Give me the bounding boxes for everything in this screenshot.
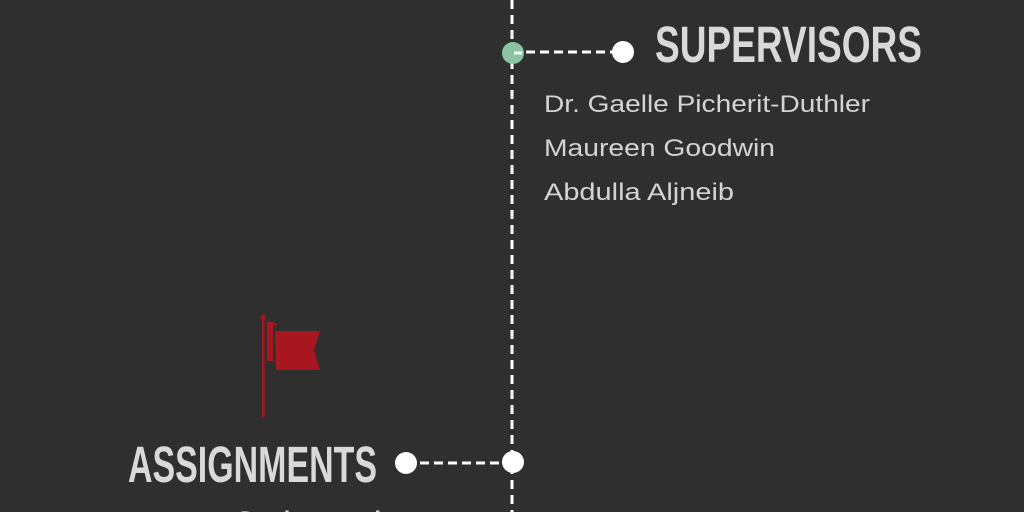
heading: assignments: ASSIGNMENTS [128,436,377,493]
supervisors connector [502,41,634,64]
heading: supervisors: SUPERVISORS [655,16,922,73]
supervisors list: Abdulla Aljneib [544,179,734,206]
supervisors list [544,91,870,206]
supervisors list: Dr. Gaelle Picherit-Duthler [544,91,870,118]
supervisors list: Maureen Goodwin [544,135,775,162]
assignments connector [395,451,524,474]
icon: red flag [260,314,320,417]
timeline vertical dashed line [510,0,514,512]
